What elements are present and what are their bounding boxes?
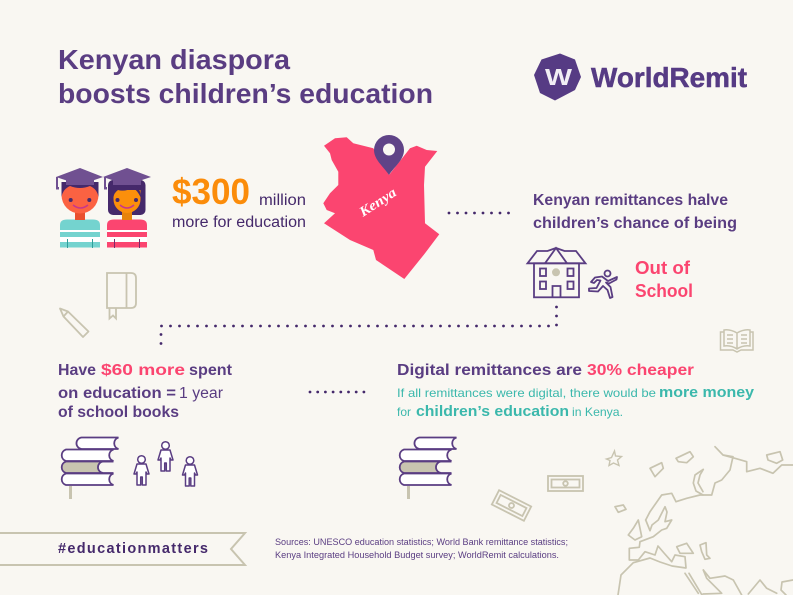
map: world outline [615,447,793,595]
title [58,44,433,109]
icon: school house [528,248,586,297]
icon: stack of books, right [400,438,456,499]
icon: three children [134,442,198,486]
stat: $300 million [172,171,306,231]
text: digital remittances [397,362,755,420]
icon: pencil [60,308,88,337]
stat: $300 million: million [259,192,306,209]
stat: $300 million: more for education [172,214,306,231]
text: digital remittances: 30% cheaper [587,362,694,379]
icon: open book [720,330,753,352]
logo: WorldRemit: W [545,64,572,90]
text: $60 more on education: on education = [58,385,176,402]
text: sources: Sources: UNESCO education statistics; World Bank remittance statistics; [275,537,568,547]
text: digital remittances: in Kenya. [572,405,623,419]
icon: notebook [107,273,136,318]
text: digital remittances: for [397,405,411,419]
dotted connector: books to digital [310,391,364,393]
text: $60 more on education [58,362,232,421]
logo: WorldRemit [534,54,747,100]
text: sources: Kenya Integrated Household Budget survey; WorldRemit calculations. [275,550,559,560]
text: $60 more on education: 1 year [179,385,223,402]
text: sources [275,537,568,560]
stat: $300 million: $300 [172,171,250,212]
icon: graduates [56,168,151,248]
logo: WorldRemit: WorldRemit [591,62,747,93]
text: $60 more on education: Have [58,362,96,379]
icon: stack of books, left [62,438,118,499]
text: $60 more on education: spent [189,362,232,379]
icon: map pin [374,135,404,175]
boy student [56,168,103,248]
icon: banknote, tilted [492,490,531,521]
text: Out of School: Out of [635,257,691,278]
icon: banknote, flat [548,476,583,491]
text: Kenyan remittances halve: children’s chance of being [533,215,737,232]
text: Out of School: School [635,280,693,301]
text: digital remittances: If all remittances were digital, there would be [397,386,656,400]
text: digital remittances: more money [659,384,755,401]
dotted connector: map to remittances [449,212,509,214]
text: Kenyan remittances halve [533,192,737,232]
text: digital remittances: children’s education [416,403,569,420]
icon: running child [589,270,617,298]
map: Kenya: Kenya [356,185,400,221]
icon: star [606,451,622,466]
text: $60 more on education: $60 more [101,362,185,379]
banner: hashtag [0,533,245,565]
text: Out of School [635,257,693,301]
dotted connector: school to books [161,307,556,346]
text: Kenyan remittances halve: Kenyan remittances halve [533,192,728,209]
text: digital remittances: Digital remittances are [397,362,582,379]
title: Kenyan diaspora [58,44,290,75]
text: $60 more on education: of school books [58,404,179,421]
banner: hashtag: #educationmatters [58,541,208,557]
title: boosts children’s education [58,78,433,109]
girl student [103,168,151,248]
map: Kenya [323,135,439,279]
